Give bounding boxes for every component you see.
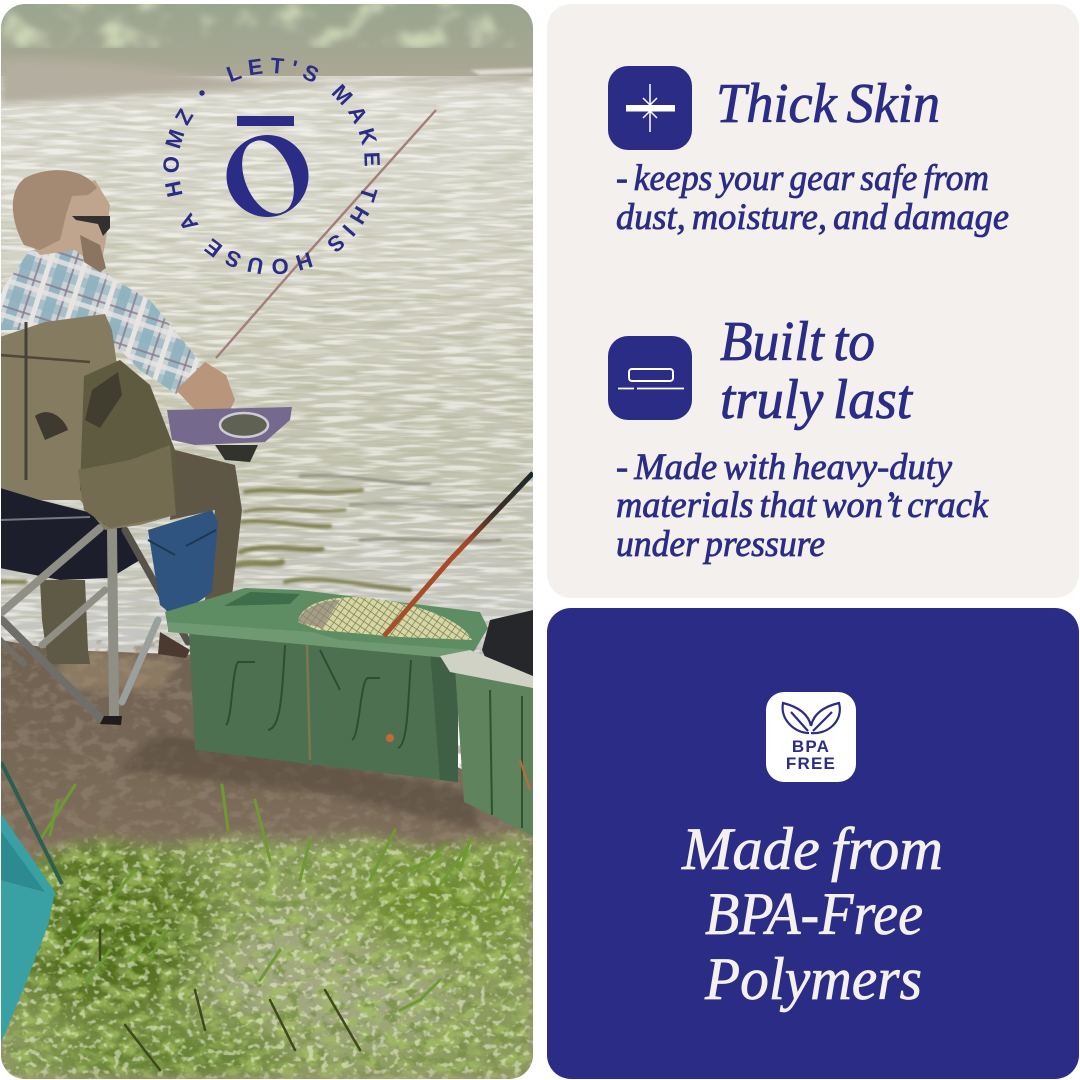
heading: made from BPA-free polymers [681, 816, 943, 1012]
text: thick skin description: dust, moisture, and damage [616, 197, 1009, 238]
text: built to last description [616, 447, 989, 565]
grass [0, 785, 533, 1080]
grass blades [40, 785, 520, 1010]
leaves [783, 703, 840, 733]
logo letter o [227, 135, 309, 217]
bin body [189, 632, 458, 782]
tagline dot [199, 90, 205, 96]
panel: cream features card [547, 4, 1079, 598]
sunglasses [72, 216, 110, 236]
heading: built to truly last: Built to [720, 311, 875, 373]
text: built to last description: - Made with heavy-duty [616, 447, 953, 488]
far shoreline and trees [0, 0, 533, 104]
purple armrest [167, 407, 292, 445]
panel: fishing photo [1, 4, 533, 1079]
icon: BPA free badge [766, 692, 856, 782]
arm [176, 362, 235, 410]
hair [13, 170, 97, 250]
circular tagline: LET'S MAKE THIS HOUSE A HOMZ [163, 58, 380, 274]
fishing rod [216, 110, 436, 358]
heading: thick skin: Thick Skin [716, 73, 940, 135]
red rod and reel handle [384, 473, 533, 636]
grass field [0, 810, 533, 1080]
heading: built to truly last: truly last [720, 369, 913, 431]
text: thick skin description [616, 158, 1009, 238]
chair seat [0, 487, 140, 580]
beard [80, 235, 106, 272]
second bin [440, 610, 533, 836]
icon: built to last [608, 336, 692, 420]
icon: BPA free badge: FREE [786, 754, 836, 773]
teal tent [0, 762, 62, 1045]
panel: navy BPA-free card [547, 608, 1079, 1079]
water [0, 60, 533, 660]
bin rim front [168, 622, 470, 660]
BPA free label: BPA [792, 737, 830, 756]
canvas backpack [0, 314, 175, 530]
text: built to last description: under pressure [616, 524, 825, 565]
fisherman [0, 170, 242, 664]
text: built to last description: materials that won’t crack [616, 485, 989, 526]
logo badge [163, 58, 380, 274]
heading: made from BPA-free polymers: Made from [681, 816, 943, 882]
chair legs [0, 528, 188, 718]
text: thick skin description: - keeps your gear safe from [616, 158, 989, 199]
net in bin [298, 597, 472, 640]
icon: thick skin [608, 66, 692, 150]
plaid shirt [0, 250, 205, 394]
logo macron bar [237, 116, 294, 126]
blue tool pouch [148, 510, 218, 618]
head and neck [34, 180, 110, 256]
heading: made from BPA-free polymers: BPA-Free [705, 881, 923, 947]
heading: made from BPA-free polymers: Polymers [704, 946, 922, 1012]
camping chair [0, 314, 292, 725]
green storage bin [165, 588, 488, 782]
heading: built to truly last [720, 311, 913, 431]
legs [40, 580, 90, 664]
muddy ground [0, 640, 533, 1079]
moulded bin details [226, 645, 411, 748]
